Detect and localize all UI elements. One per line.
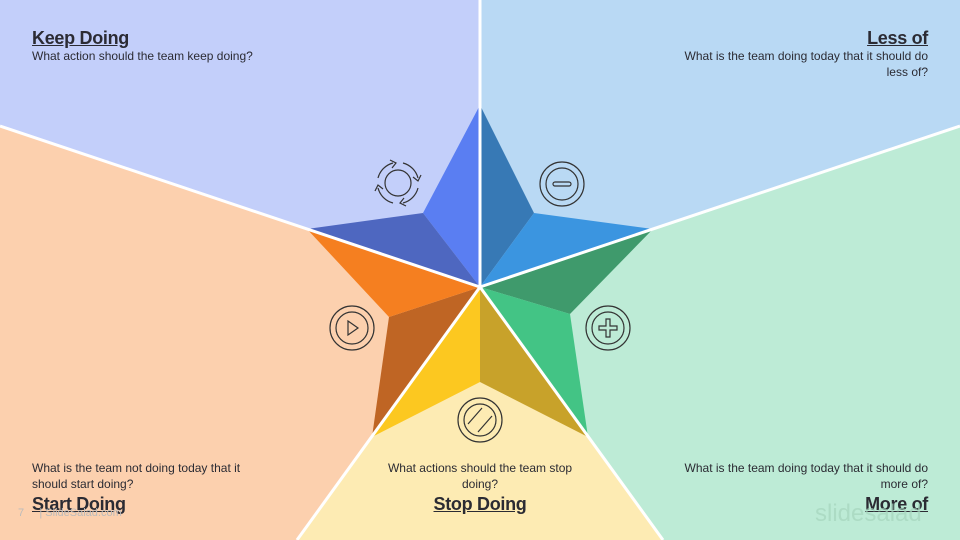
panel: keep doing background [0,0,480,287]
icon: cycle arrows [375,160,421,206]
icon: plus [586,306,630,350]
text: start doing: Start Doing [32,494,126,514]
watermark: slidesalad [815,500,922,527]
footer: 7 | SlideSalad.com [18,507,122,519]
panel: less of background [480,0,960,287]
star [307,105,653,437]
text: start doing: should start doing? [32,477,133,491]
text: more of: What is the team doing today that it should do [685,461,928,475]
text: more of: more of? [881,477,928,491]
icon: minus [540,162,584,206]
text: stop doing: What actions should the team stop [388,461,572,475]
icon: stop sign [458,398,502,442]
text: keep doing: What action should the team keep doing? [32,49,253,63]
panel: start doing background [0,126,480,540]
text: stop doing: Stop Doing [434,494,526,514]
text: start doing: What is the team not doing today that it [32,461,240,475]
text: stop doing [388,461,572,514]
text: keep doing [32,28,253,63]
text: stop doing: doing? [462,477,498,491]
panel: stop doing background [297,287,663,540]
icon: play [330,306,374,350]
text: start doing [32,461,240,514]
text: less of: What is the team doing today that it should do [685,49,928,63]
text: less of: Less of [867,28,928,48]
text: more of [684,461,928,514]
text: keep doing: Keep Doing [32,28,129,48]
text: more of: More of [865,494,928,514]
panel: more of background [480,126,960,540]
text: less of: less of? [887,65,928,79]
text: less of [684,28,928,79]
